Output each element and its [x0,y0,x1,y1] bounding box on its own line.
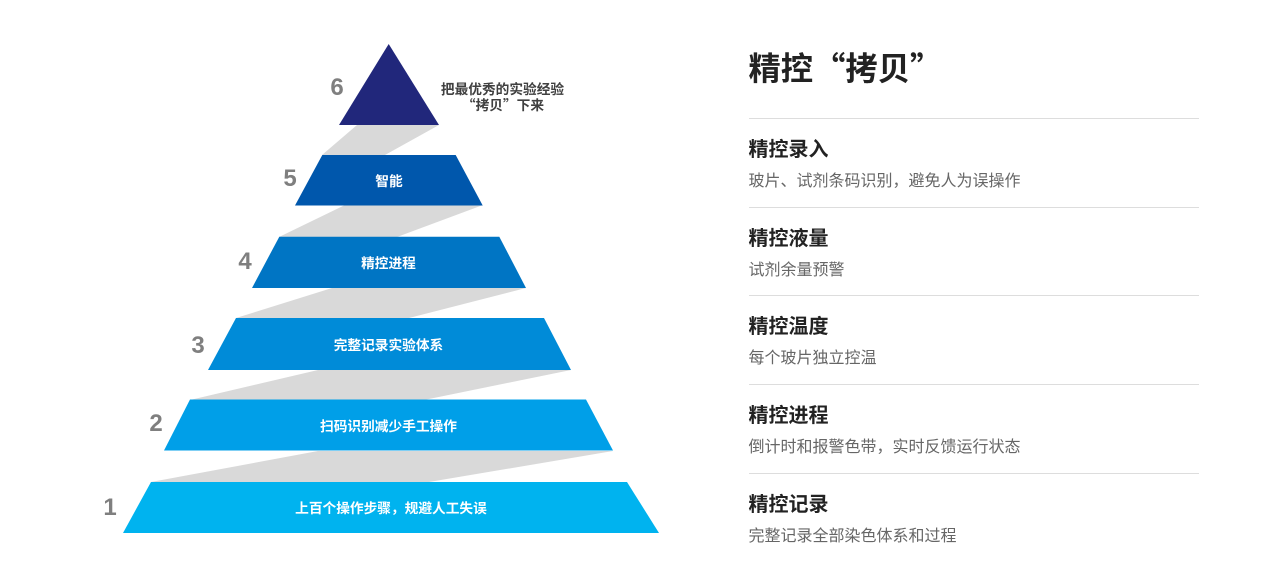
connector shadows between levels [151,125,613,482]
level 5: 智能: 5 [283,165,297,192]
level 4: 精控进程: 精控进程 [361,255,416,271]
level 3: 完整记录实验体系 [191,318,571,370]
item: 精控温度: 每个玻片独立控温 [748,350,877,367]
level 6: triangle [330,44,439,125]
heading: 精控“拷贝” [748,44,942,90]
item: 精控进程: 精控进程 [748,405,828,427]
level 2: 扫码识别减少手工操作: 2 [149,410,163,437]
level 6 caption: “拷贝”下来 [462,94,544,114]
level 3: 完整记录实验体系: 3 [191,332,205,359]
item: 精控进程 [748,404,1021,456]
level 1: 上百个操作步骤，规避人工失误: 上百个操作步骤，规避人工失误 [295,500,487,516]
item: 精控录入: 玻片、试剂条码识别，避免人为误操作 [748,173,1021,190]
pyramid diagram [103,44,659,533]
item: 精控液量: 精控液量 [748,228,828,250]
panel: feature list [748,44,1199,545]
level 4: 精控进程 [238,237,526,288]
item: 精控记录: 精控记录 [748,494,828,516]
level 5: 智能 [283,155,483,206]
item: 精控液量: 试剂余量预警 [748,262,845,279]
level 6 caption: 把最优秀的实验经验 [441,81,564,97]
level 6 caption [441,81,564,114]
level 6: triangle: 6 [330,74,344,101]
item: 精控录入 [748,138,1021,190]
level 1: 上百个操作步骤，规避人工失误 [103,482,659,533]
level 2: 扫码识别减少手工操作 [149,400,613,450]
item: 精控录入: 精控录入 [748,139,828,161]
item: 精控进程: 倒计时和报警色带，实时反馈运行状态 [748,439,1021,456]
item: 精控记录 [748,494,957,545]
item: 精控温度 [748,316,877,367]
level 3: 完整记录实验体系: 完整记录实验体系 [334,337,443,353]
item: 精控液量 [748,228,845,279]
level 5: 智能: 智能 [375,173,403,189]
item: 精控记录: 完整记录全部染色体系和过程 [748,528,957,545]
level 4: 精控进程: 4 [238,248,252,275]
level 1: 上百个操作步骤，规避人工失误: 1 [103,494,117,521]
level 2: 扫码识别减少手工操作: 扫码识别减少手工操作 [320,418,457,434]
item: 精控温度: 精控温度 [748,316,828,338]
